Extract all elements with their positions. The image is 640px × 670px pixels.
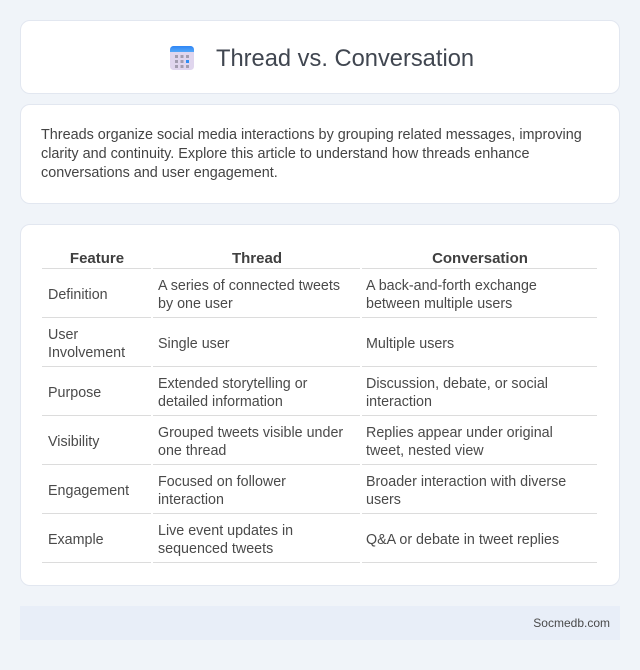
intro paragraph: Threads organize social media interactions by grouping related messages, improving	[41, 127, 582, 143]
row: engagement: interaction	[158, 492, 224, 508]
row: engagement: Focused on follower	[158, 474, 286, 490]
row: definition: Definition	[48, 287, 108, 303]
column headers: Thread	[232, 250, 282, 267]
panel: intro text	[20, 104, 620, 204]
row: example: sequenced tweets	[158, 541, 273, 557]
row: user involvement: Multiple users	[366, 336, 454, 352]
row: definition: by one user	[158, 296, 233, 312]
row: visibility	[48, 425, 553, 459]
row: engagement	[48, 474, 566, 508]
row: engagement: users	[366, 492, 401, 508]
row: visibility: tweet, nested view	[366, 443, 484, 459]
row: example: Q&A or debate in tweet replies	[366, 532, 559, 548]
intro paragraph: clarity and continuity. Explore this article to understand how threads enhance	[41, 146, 530, 162]
panel: comparison table	[20, 224, 620, 586]
row: visibility: Grouped tweets visible under	[158, 425, 343, 441]
row: visibility: Replies appear under original	[366, 425, 553, 441]
row: example: Live event updates in	[158, 523, 293, 539]
row: user involvement	[48, 327, 454, 361]
row: purpose	[48, 376, 548, 410]
column headers: Feature	[70, 250, 124, 267]
row: user involvement: User	[48, 327, 78, 343]
table: feature comparison	[42, 250, 597, 563]
footer bar	[20, 606, 620, 640]
row: purpose: Extended storytelling or	[158, 376, 307, 392]
intro paragraph: conversations and user engagement.	[41, 165, 278, 181]
row: user involvement: Single user	[158, 336, 230, 352]
row: definition: A series of connected tweets	[158, 278, 340, 294]
row: definition: between multiple users	[366, 296, 512, 312]
row: engagement: Engagement	[48, 483, 129, 499]
footer credit: Socmedb.com	[533, 616, 610, 630]
row: example	[48, 523, 559, 557]
column headers	[70, 250, 528, 267]
row: user involvement: Involvement	[48, 345, 125, 361]
row: definition	[48, 278, 537, 312]
row: example: Example	[48, 532, 104, 548]
row: purpose: Purpose	[48, 385, 101, 401]
row: visibility: one thread	[158, 443, 226, 459]
column headers: Conversation	[432, 250, 528, 267]
row: purpose: detailed information	[158, 394, 283, 410]
row: definition: A back-and-forth exchange	[366, 278, 537, 294]
row: purpose: interaction	[366, 394, 432, 410]
row: visibility: Visibility	[48, 434, 99, 450]
intro paragraph	[41, 127, 582, 181]
title: Thread vs. Conversation	[216, 46, 474, 72]
row: purpose: Discussion, debate, or social	[366, 376, 548, 392]
icon: calendar	[170, 46, 194, 70]
row: engagement: Broader interaction with diverse	[366, 474, 566, 490]
panel: title card	[20, 20, 620, 94]
